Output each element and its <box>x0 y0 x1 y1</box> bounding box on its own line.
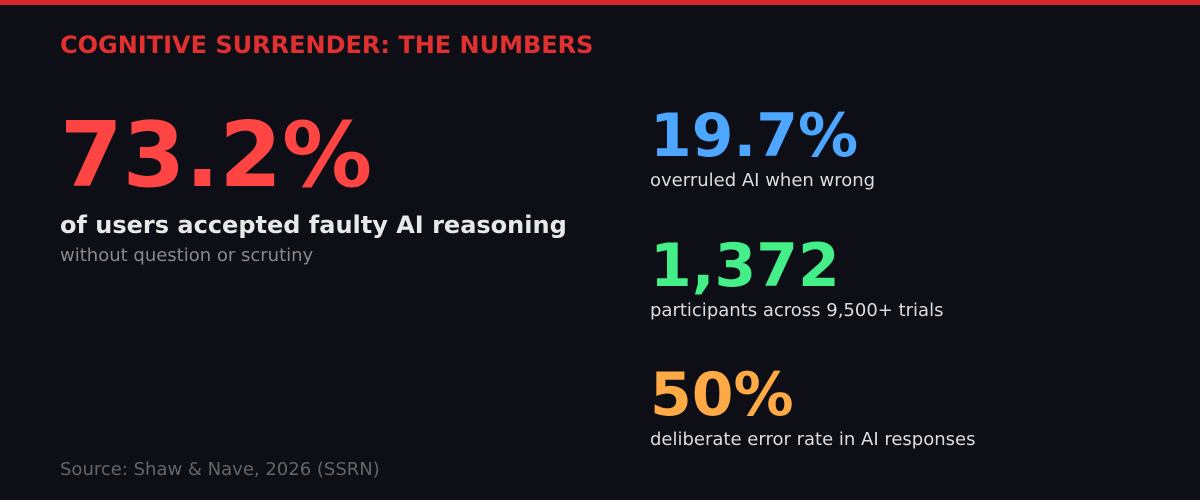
label: deliberate error rate in AI responses <box>650 429 975 450</box>
stat: overruled <box>650 101 875 191</box>
hero stat panel <box>60 103 567 266</box>
title: COGNITIVE SURRENDER: THE NUMBERS <box>60 31 593 59</box>
number 19.7%: 19.7% <box>650 101 858 171</box>
top accent bar <box>0 0 1200 5</box>
hero subcaption: without question or scrutiny <box>60 245 313 266</box>
number 50%: 50% <box>650 360 794 430</box>
source note: Source: Shaw & Nave, 2026 (SSRN) <box>60 459 380 480</box>
hero number: 73.2% <box>60 103 372 208</box>
hero caption: of users accepted faulty AI reasoning <box>60 211 567 239</box>
number 1,372: 1,372 <box>650 231 840 301</box>
label: overruled AI when wrong <box>650 170 875 191</box>
label: participants across 9,500+ trials <box>650 300 943 321</box>
stat: participants <box>650 231 943 321</box>
stat: error rate <box>650 360 975 450</box>
